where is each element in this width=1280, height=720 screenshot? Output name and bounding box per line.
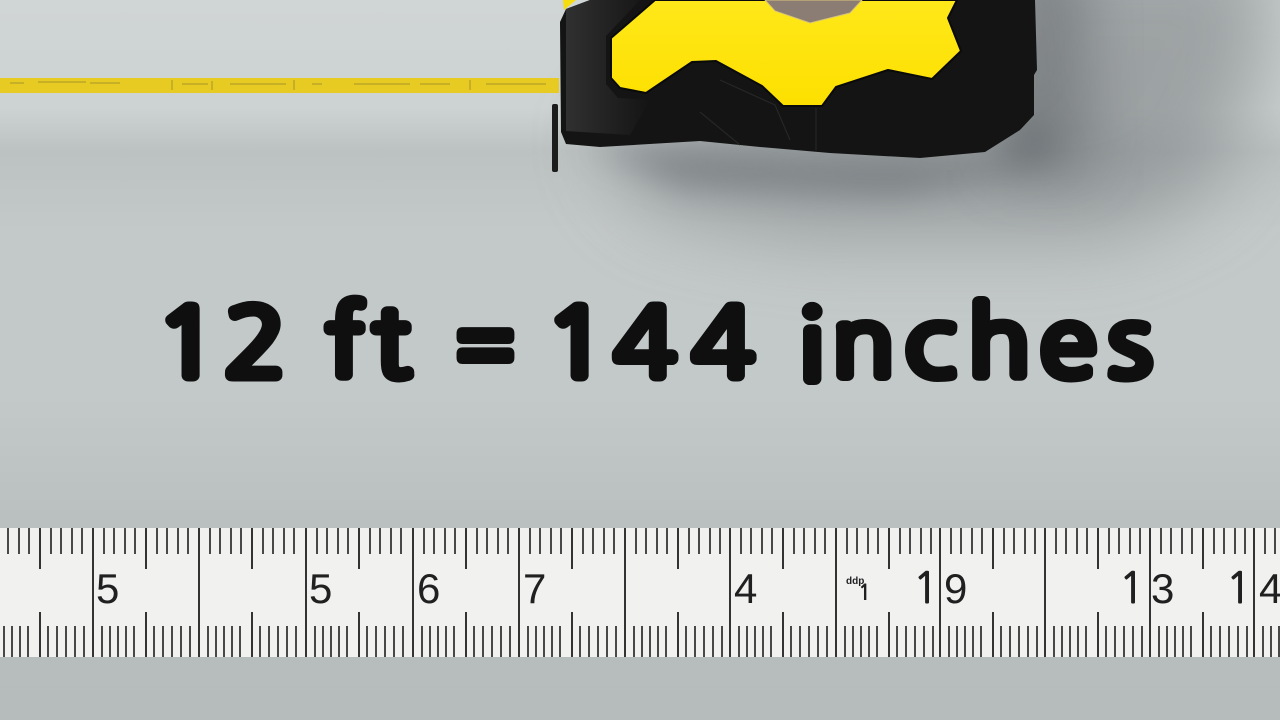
equation heading: 12 <box>156 296 287 390</box>
lower seams <box>700 80 816 150</box>
ruler numbers: 1 <box>1226 568 1251 610</box>
equation heading: 144 <box>545 296 755 390</box>
ruler numbers: 4 <box>734 565 757 612</box>
ruler numbers: 7 <box>523 565 546 612</box>
centre hub <box>765 0 862 23</box>
ruler numbers: 3 <box>1151 565 1174 612</box>
equation heading <box>156 296 1152 390</box>
white ruler <box>0 528 1280 657</box>
ruler numbers: 5 <box>96 565 119 612</box>
yellow tab top-left <box>563 0 576 10</box>
ruler strip <box>0 528 1280 657</box>
yellow gear <box>611 0 961 106</box>
equation heading: ft <box>326 296 410 390</box>
equation heading: inches <box>799 296 1152 390</box>
tape blade markings <box>10 80 546 90</box>
shadow of tape measure <box>585 0 1270 235</box>
ruler numbers: 1 <box>1119 568 1144 610</box>
ruler numbers: 6 <box>417 565 440 612</box>
ruler ticks <box>0 528 1280 657</box>
yellow tape blade <box>0 78 559 93</box>
ruler numbers: ddp <box>846 576 864 587</box>
tape hook <box>552 104 558 172</box>
tape measure case <box>560 0 1037 158</box>
ruler numbers: 5 <box>309 565 332 612</box>
ruler numbers <box>96 565 1280 612</box>
case body <box>560 0 1037 158</box>
equation heading: = <box>456 297 514 390</box>
ruler numbers: 9 <box>944 565 967 612</box>
case highlight <box>566 0 650 135</box>
ruler numbers: 1 <box>913 568 938 610</box>
ruler numbers: 1 <box>858 582 871 604</box>
